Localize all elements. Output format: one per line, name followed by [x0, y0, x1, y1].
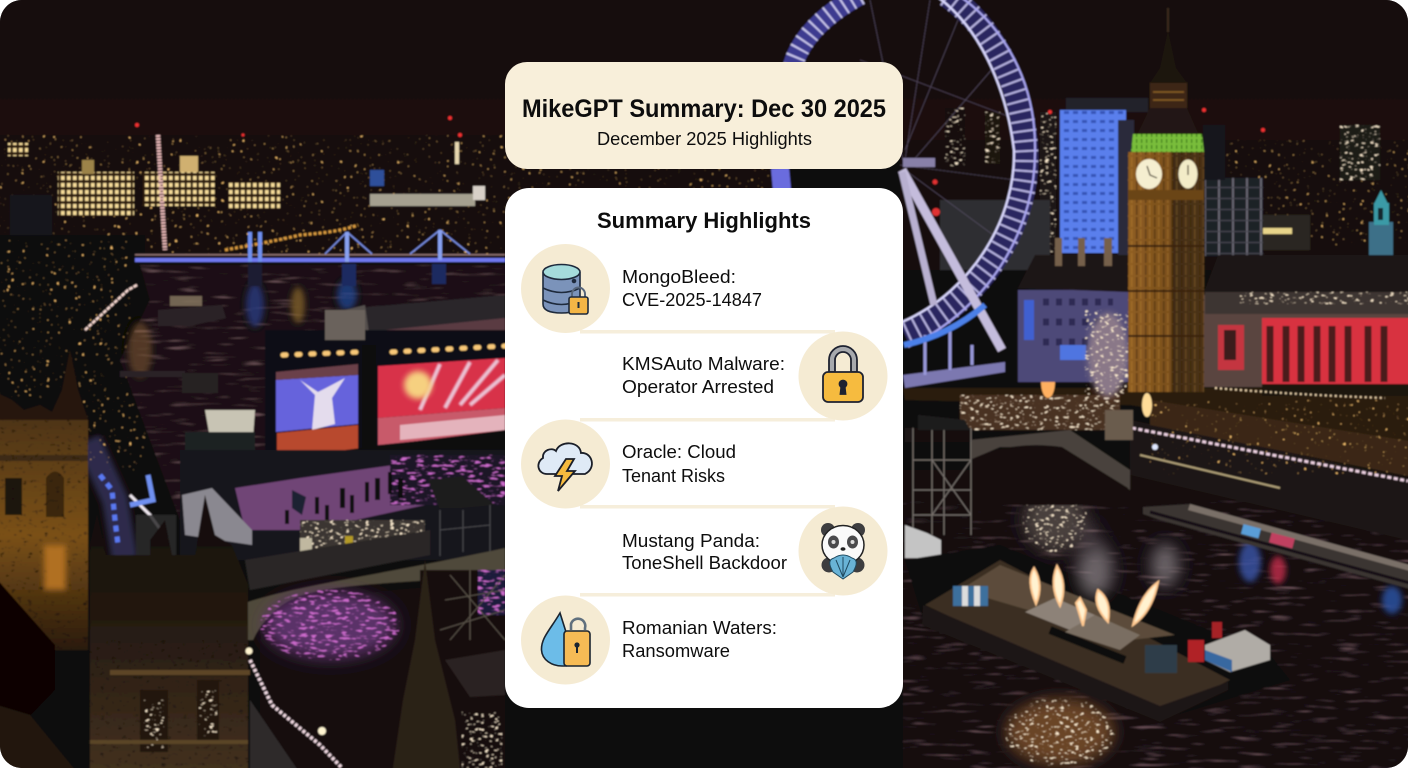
wheel: rim and spokes — [780, 0, 1035, 347]
left embankment trees — [0, 234, 146, 435]
foreground spire — [390, 560, 462, 768]
item text: Romanian Waters: — [622, 618, 777, 638]
embankment and bridge right — [903, 380, 1408, 540]
firework flames — [1030, 566, 1158, 626]
item text: Tenant Risks — [622, 466, 725, 486]
scaffold and small barge by bridge — [440, 570, 505, 697]
panel heading: Summary Highlights — [597, 208, 811, 233]
lit walkway string — [246, 648, 342, 768]
item text: Operator Arrested — [622, 377, 774, 397]
item: Oracle — [521, 420, 736, 508]
distant city right — [900, 108, 1408, 270]
Westminster dark tower — [0, 495, 250, 768]
gothic tower left — [0, 350, 90, 715]
item text: Oracle: Cloud — [622, 442, 736, 462]
item text: MongoBleed: — [622, 267, 736, 287]
item: Mustang Panda — [622, 506, 888, 596]
icon: database with lock — [543, 264, 588, 314]
night sky — [0, 0, 1408, 145]
blue-lit tower block — [1060, 98, 1148, 255]
road and stone bridge — [245, 530, 505, 768]
illuminated bridge with towers — [135, 135, 505, 286]
stage structure — [184, 296, 505, 452]
scaffold tower — [912, 415, 972, 548]
item text: ToneShell Backdoor — [622, 553, 787, 573]
street lights left — [88, 400, 176, 575]
icon: panda holding shell — [821, 523, 865, 579]
summary highlights panel — [505, 188, 903, 708]
firework barge — [905, 545, 1290, 722]
river boat — [1143, 504, 1408, 594]
county hall left — [1018, 238, 1130, 397]
connector lines — [580, 330, 835, 596]
item: Romanian Waters — [521, 596, 777, 684]
icon: padlock — [823, 346, 863, 402]
county hall right with red columns — [1200, 255, 1408, 398]
item text: CVE-2025-14847 — [622, 290, 762, 310]
Big Ben clock tower — [1128, 8, 1204, 392]
item: MongoBleed — [521, 244, 762, 333]
grey office block — [1205, 178, 1263, 256]
title: MikeGPT Summary: Dec 30 2025 — [522, 95, 886, 123]
lower right river — [903, 470, 1408, 768]
item text: KMSAuto Malware: — [622, 354, 785, 374]
item text: Ransomware — [622, 641, 730, 661]
river upper — [120, 265, 505, 520]
river reflections under bridge — [260, 570, 505, 768]
wheel support legs — [902, 158, 1005, 388]
tower roof and spire — [1138, 108, 1198, 133]
item: KMSAuto Malware — [622, 332, 888, 420]
teal turret — [1369, 190, 1393, 274]
item text: Mustang Panda: — [622, 531, 760, 551]
white marquee — [905, 525, 941, 558]
clock faces — [1136, 159, 1162, 189]
crowd plaza — [180, 450, 505, 560]
icon: water drop with lock — [541, 613, 590, 666]
fireworks smoke — [1077, 522, 1179, 598]
subtitle: December 2025 Highlights — [597, 129, 812, 149]
belfry green band — [1131, 134, 1204, 152]
icon: storm cloud — [538, 443, 592, 491]
header panel — [505, 62, 903, 169]
distant city left — [0, 116, 780, 260]
